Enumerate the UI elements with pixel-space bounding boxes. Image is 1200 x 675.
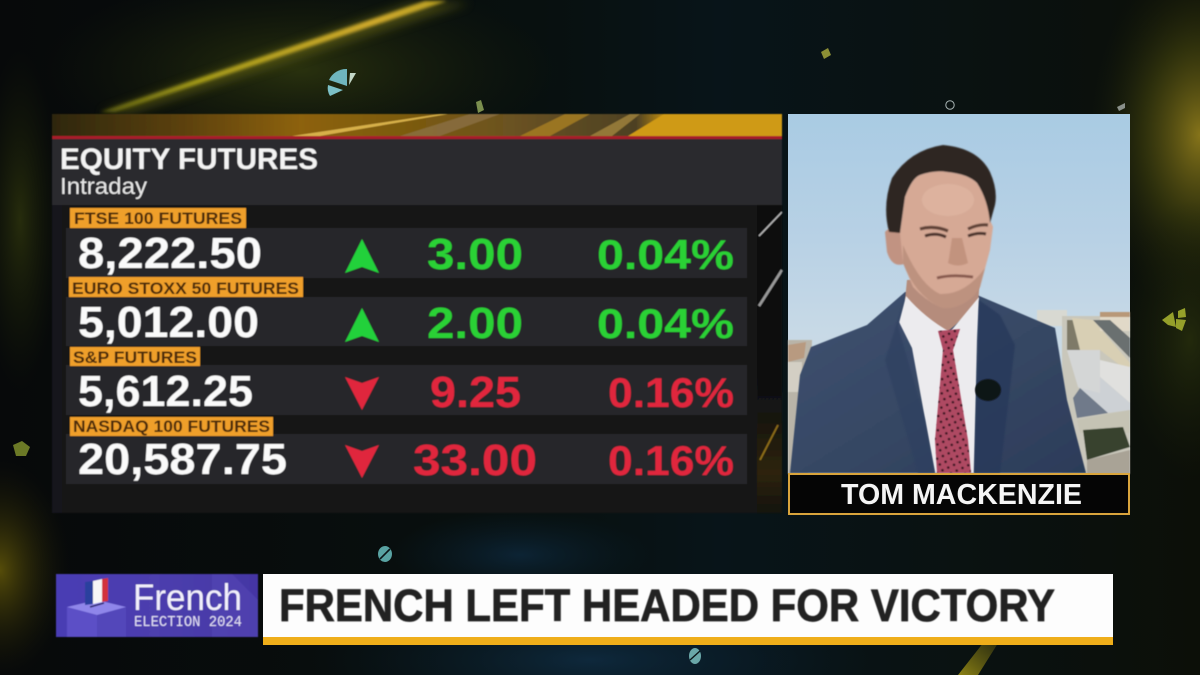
row: Nasdaq 100: 0.16%: [608, 437, 734, 484]
table background: [62, 205, 757, 513]
right edge with slashes: [757, 205, 782, 513]
row: Euro Stoxx 50: [66, 277, 747, 348]
mouth: [937, 276, 973, 278]
lapel shadows: [885, 294, 935, 473]
row: S&P: 0.16%: [608, 369, 734, 416]
header background: [52, 139, 782, 205]
brows: [920, 225, 988, 231]
name plate: [789, 474, 1129, 514]
face: [900, 171, 993, 308]
heading: EQUITY FUTURES: [60, 143, 318, 176]
row: Euro Stoxx 50: EURO STOXX 50 FUTURES: [72, 279, 299, 298]
row: FTSE 100: [66, 208, 747, 279]
gold top band: [52, 114, 782, 136]
panel: equity futures: [52, 114, 782, 513]
suit: [790, 292, 1086, 473]
neck: [905, 275, 980, 338]
name plate: TOM MACKENZIE: [841, 479, 1082, 511]
row: S&P: 5,612.25: [78, 367, 253, 416]
rooftops: [788, 310, 1130, 474]
tie: [935, 329, 971, 473]
logo: French Election 2024: [56, 574, 258, 637]
row: FTSE 100: FTSE 100 FUTURES: [74, 209, 242, 228]
row: S&P: S&P FUTURES: [73, 348, 197, 367]
row: Nasdaq 100: 33.00: [413, 436, 537, 485]
microphone: [975, 379, 1001, 401]
row: Nasdaq 100: NASDAQ 100 FUTURES: [73, 417, 270, 436]
row: S&P: [66, 347, 747, 417]
row: Euro Stoxx 50: 2.00: [427, 299, 523, 348]
hair: [886, 145, 996, 233]
row: Nasdaq 100: 20,587.75: [78, 435, 287, 484]
subheading: Intraday: [60, 173, 148, 199]
sky: [788, 114, 1130, 474]
row: Euro Stoxx 50: 5,012.00: [78, 298, 259, 347]
row: FTSE 100: 3.00: [427, 230, 523, 279]
row: FTSE 100: 0.04%: [597, 231, 734, 278]
ear: [885, 228, 904, 265]
head: [885, 145, 996, 308]
headline bar: FRENCH LEFT HEADED FOR VICTORY: [279, 580, 1055, 631]
row: FTSE 100: 8,222.50: [78, 229, 262, 278]
cheek shade: [903, 245, 985, 308]
icon: ballot box with French flag: [67, 578, 126, 637]
light streak top left: [100, 1, 470, 113]
nose: [948, 238, 968, 266]
panel: correspondent video: [788, 114, 1130, 514]
light streak bottom: [958, 624, 1010, 675]
panel base: [52, 114, 782, 513]
row: S&P: 9.25: [430, 368, 521, 417]
shirt: [899, 296, 979, 473]
row: Nasdaq 100: [66, 417, 747, 485]
forehead highlight: [922, 184, 974, 216]
row: Euro Stoxx 50: 0.04%: [597, 300, 734, 347]
eyes: [925, 233, 986, 237]
logo subtitle: ELECTION 2024: [134, 614, 242, 631]
logo word: French: [133, 577, 242, 618]
